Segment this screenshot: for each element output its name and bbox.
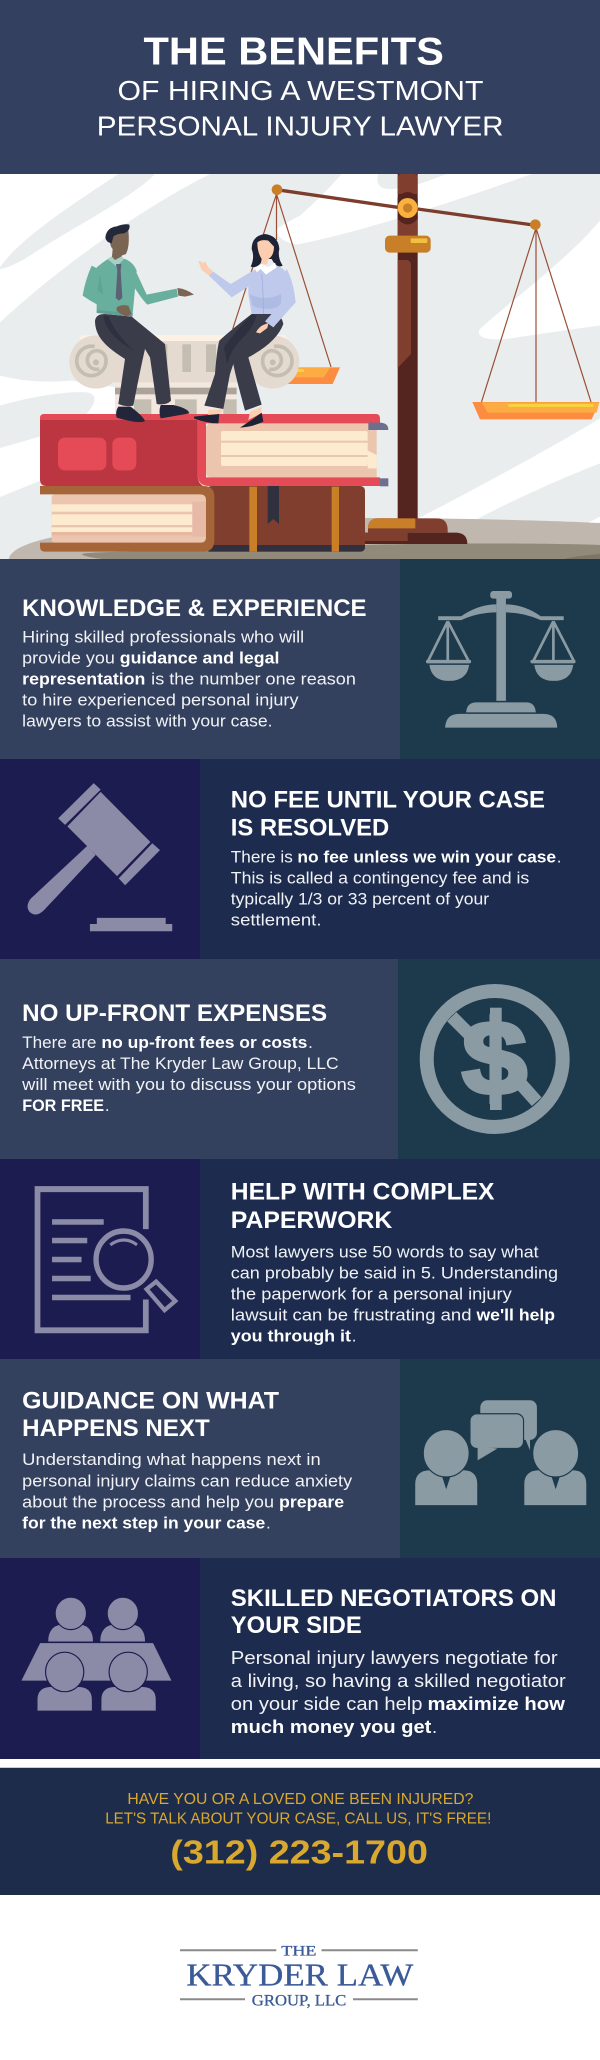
header banner bbox=[0, 0, 600, 174]
call to action banner bbox=[0, 1767, 600, 1895]
body text: much money you get bbox=[231, 1716, 431, 1737]
body text: FOR FREE bbox=[22, 1096, 104, 1115]
body text: prepare bbox=[279, 1492, 344, 1511]
body text bbox=[231, 1647, 566, 1737]
body text: . bbox=[352, 1326, 356, 1345]
call to action text: HAVE YOU OR A LOVED ONE BEEN INJURED? bbox=[127, 1791, 473, 1808]
phone number: (312) 223-1700 bbox=[170, 1834, 428, 1871]
body text: . bbox=[557, 847, 562, 866]
subtitle line two: PERSONAL INJURY LAWYER bbox=[97, 111, 504, 142]
body text: no fee unless we win your case bbox=[297, 847, 556, 866]
heading bbox=[231, 1585, 557, 1639]
body text: settlement. bbox=[231, 910, 322, 930]
body text bbox=[22, 1450, 353, 1532]
body text: Attorneys at The Kryder Law Group, LLC bbox=[22, 1054, 339, 1073]
heading: SKILLED NEGOTIATORS ON bbox=[231, 1585, 557, 1612]
logo bbox=[180, 1944, 418, 2009]
heading: NO FEE UNTIL YOUR CASE bbox=[231, 787, 545, 814]
body text: lawsuit can be frustrating and bbox=[231, 1305, 472, 1324]
scale base bbox=[353, 518, 467, 544]
heading: GUIDANCE ON WHAT bbox=[22, 1388, 279, 1415]
logo: THE bbox=[281, 1944, 316, 1960]
panel: no up-front expenses bbox=[0, 959, 600, 1159]
body text: . bbox=[308, 1033, 313, 1052]
icon: document and magnifier bbox=[38, 1189, 175, 1330]
icon: gavel bbox=[28, 783, 172, 931]
panel: no fee until your case is resolved bbox=[0, 759, 600, 959]
body text: maximize how bbox=[428, 1693, 566, 1714]
body text: you through it bbox=[231, 1326, 351, 1345]
book stack bbox=[40, 414, 388, 552]
heading: NO UP-FRONT EXPENSES bbox=[22, 1000, 327, 1027]
body text bbox=[21, 1033, 356, 1115]
logo: GROUP, LLC bbox=[252, 1992, 346, 2009]
body text: Hiring skilled professionals who will bbox=[22, 627, 304, 646]
body text: provide you bbox=[22, 648, 115, 667]
body text: There is bbox=[231, 847, 293, 866]
body text: for the next step in your case bbox=[22, 1513, 265, 1532]
body text bbox=[231, 1242, 558, 1345]
body text: will meet with you to discuss your options bbox=[21, 1075, 356, 1094]
woman feet bbox=[194, 407, 263, 428]
ground shadow bbox=[9, 518, 600, 560]
column capital bbox=[69, 335, 299, 415]
body text: can probably be said in 5. Understanding bbox=[231, 1264, 558, 1282]
body text: about the process and help you bbox=[22, 1492, 274, 1511]
icon: people around a table bbox=[21, 1597, 171, 1711]
body text: no up-front fees or costs bbox=[101, 1033, 307, 1052]
body text bbox=[22, 627, 356, 730]
body text: a living, so having a skilled negotiator bbox=[231, 1670, 566, 1691]
body text: . bbox=[105, 1096, 110, 1115]
call to action text: LET'S TALK ABOUT YOUR CASE, CALL US, IT'S FREE! bbox=[105, 1810, 491, 1827]
title: THE BENEFITS bbox=[144, 31, 444, 74]
red book bbox=[40, 414, 388, 486]
subtitle line one: OF HIRING A WESTMONT bbox=[118, 75, 483, 106]
panel: skilled negotiators on your side bbox=[0, 1558, 600, 1759]
man shoes bbox=[116, 405, 189, 422]
logo: KRYDER LAW bbox=[186, 1956, 414, 1992]
body text: personal injury claims can reduce anxiety bbox=[22, 1472, 353, 1490]
body text bbox=[231, 847, 562, 930]
body text: typically 1/3 or 33 percent of your bbox=[231, 889, 489, 908]
heading: PAPERWORK bbox=[231, 1207, 393, 1234]
body text: lawyers to assist with your case. bbox=[22, 712, 273, 730]
body text: we'll help bbox=[475, 1305, 555, 1324]
heading: HAPPENS NEXT bbox=[22, 1415, 210, 1442]
body text: Most lawyers use 50 words to say what bbox=[231, 1242, 539, 1262]
heading: IS RESOLVED bbox=[231, 814, 389, 842]
man figure bbox=[83, 224, 194, 406]
icon: scales of justice bbox=[426, 591, 576, 728]
body text: guidance and legal bbox=[120, 648, 279, 667]
heading: KNOWLEDGE & EXPERIENCE bbox=[22, 595, 367, 622]
call to action text bbox=[105, 1791, 491, 1827]
body text: the paperwork for a personal injury bbox=[231, 1284, 512, 1304]
hero illustration bbox=[0, 174, 600, 560]
heading bbox=[231, 787, 545, 842]
scale post and beam bbox=[272, 174, 541, 521]
body text: There are bbox=[22, 1033, 96, 1052]
woman figure bbox=[198, 234, 296, 411]
heading bbox=[231, 1178, 495, 1234]
heading: HELP WITH COMPLEX bbox=[231, 1178, 495, 1205]
panel: guidance on what happens next bbox=[0, 1359, 600, 1558]
icon: two people talking bbox=[415, 1400, 586, 1505]
heading: YOUR SIDE bbox=[231, 1612, 362, 1639]
body text: to hire experienced personal injury bbox=[22, 690, 299, 709]
heading bbox=[22, 1388, 279, 1442]
brown book bbox=[40, 486, 365, 552]
body text: . bbox=[266, 1513, 271, 1532]
panel: knowledge and experience bbox=[0, 559, 600, 759]
body text: is the number one reason bbox=[151, 669, 356, 688]
panel: help with complex paperwork bbox=[0, 1159, 600, 1359]
body text: representation bbox=[22, 669, 145, 688]
body text: . bbox=[432, 1716, 437, 1737]
icon: crossed-out dollar bbox=[427, 991, 563, 1127]
body text: Understanding what happens next in bbox=[22, 1450, 321, 1469]
balance scale strings and pans bbox=[233, 194, 599, 419]
body text: This is called a contingency fee and is bbox=[231, 868, 529, 887]
icon: crossed-out dollar: $ bbox=[462, 1000, 527, 1117]
body text: on your side can help bbox=[231, 1693, 422, 1714]
body text: Personal injury lawyers negotiate for bbox=[231, 1647, 558, 1668]
